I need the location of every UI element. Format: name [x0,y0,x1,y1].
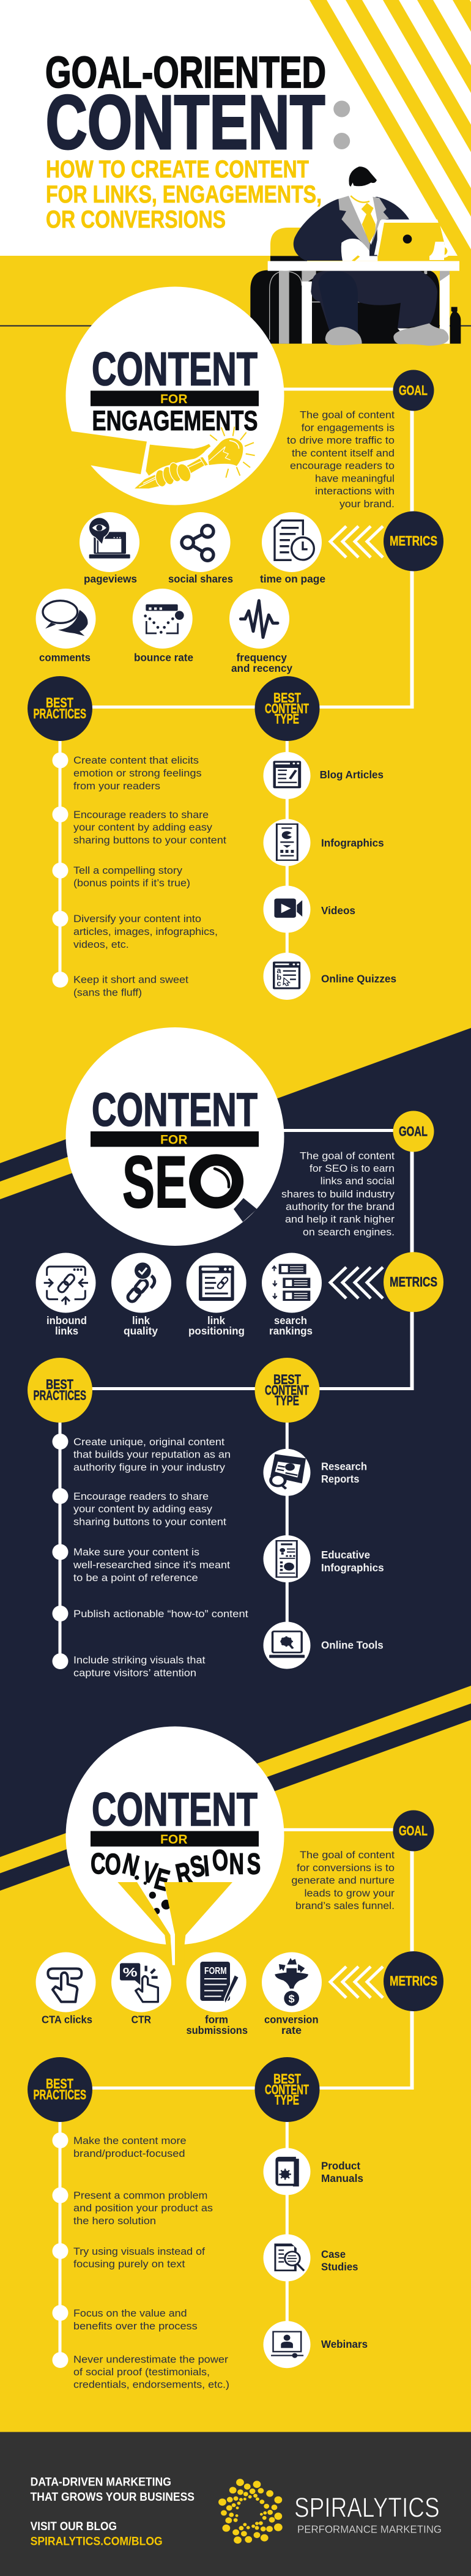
metric icon circles [35,1253,322,1313]
icon: link quality [126,1262,155,1303]
section 1 heading: CONTENT [92,343,258,395]
icon: case studies [274,2244,304,2271]
best practices list: Publish actionable “how-to” content [73,1608,248,1620]
icon: CTR [120,1963,158,2002]
goal description: the content itself and [292,447,395,459]
icon: webinars [271,2332,303,2358]
section 2 heading [91,1084,259,1223]
icon: social shares [182,526,213,560]
goal description: brand’s sales funnel. [295,1900,395,1912]
icon: pageviews [89,517,130,559]
section 3 connector lines [59,1828,414,2360]
section 1 heading: ENGAGEMENTS [92,405,258,436]
best practices badge: PRACTICES [33,706,86,721]
best practices list: Keep it short and sweet [73,974,188,986]
best content type badge: CONTENT [265,1383,309,1398]
icon: frequency [240,601,278,638]
best practices list: and position your product as [73,2202,213,2214]
content type labels: Online Quizzes [321,973,396,985]
content type labels [321,2159,368,2350]
content type labels [321,1461,384,1651]
navy section background [0,1028,471,1891]
goal badge: GOAL [399,1823,428,1838]
best practices badge: BEST [46,2076,73,2091]
metrics badge [384,1951,443,2011]
best practices list: the hero solution [73,2215,156,2227]
goal description: leads to grow your [305,1887,395,1899]
icon: educative infographics [276,1541,297,1577]
content type labels [320,769,396,985]
section 2: content for SEO [28,1027,443,1678]
arrow: metrics chevrons [330,1267,383,1298]
icon: CTR: % [123,1965,138,1980]
logo wordmark: PERFORMANCE MARKETING [297,2523,442,2536]
section 3 heading: S [247,1847,261,1880]
section 2 connector lines [59,1129,414,1661]
goal description: and help it rank higher [285,1213,395,1225]
illustration: arm holding bulb pencil [65,426,255,488]
best content type badge: BEST [273,1372,301,1387]
metric labels: conversion [264,2013,319,2025]
metric labels: links [55,1325,78,1337]
metric labels: CTA clicks [42,2013,92,2025]
footer tagline: VISIT OUR BLOG [31,2520,117,2533]
best practices list: sharing buttons to your content [73,835,226,846]
metric labels: CTR [132,2013,151,2025]
section 3 heading: E [151,1861,173,1897]
icon: research reports [270,1454,306,1489]
section 1: content for engagements [28,286,443,1000]
content type circles [263,752,311,1000]
icon: comments [43,601,87,636]
goal description: links and social [321,1175,395,1187]
icon: product manuals [275,2157,299,2186]
icon: search rankings [272,1264,310,1301]
metrics badge: METRICS [390,1973,437,1989]
metric labels: rankings [269,1325,313,1337]
icon: online quizzes [273,961,300,989]
best practices list: Tell a compelling story [73,865,183,876]
header stripes [310,0,471,256]
section 3 heading: N [229,1847,244,1880]
goal description: interactions with [315,485,395,497]
metric labels [46,1314,313,1337]
section 3 heading: O [105,1847,121,1880]
best practices badge [28,1358,92,1423]
footer background [0,2432,471,2576]
icon: form submissions [200,1962,239,2005]
footer tagline: DATA-DRIVEN MARKETING [31,2476,171,2489]
best practices list: brand/product-focused [73,2148,185,2159]
goal description: for engagements is [302,422,395,433]
metrics badge [384,512,443,571]
goal description: authority for the brand [286,1201,395,1213]
best practices list: of social proof (testimonials, [73,2366,210,2378]
metric labels: positioning [188,1325,245,1337]
arrow: metrics chevrons [330,526,383,557]
best content type badge [254,1358,319,1423]
best practices list: from your readers [73,780,160,792]
goal description: The goal of content [300,1150,395,1161]
title line: goal-oriented: GOAL-ORIENTED [45,48,326,97]
icon: inbound links [44,1267,88,1305]
logo wordmark [294,2492,442,2536]
goal badge: GOAL [399,1123,428,1139]
best practices badge: BEST [46,1377,73,1392]
best practices list: Create content that elicits [73,754,199,766]
best practices list: Encourage readers to share [73,1491,209,1502]
section 3 heading: N [119,1847,143,1882]
logo wordmark: SPIRALYTICS [294,2492,440,2523]
goal description: The goal of content [300,409,395,421]
best practices badge [28,2057,92,2122]
best practices list: to be a point of reference [73,1572,198,1584]
best practices bullets [53,2132,69,2368]
content type circles [263,1449,311,1669]
best content type badge [254,2057,319,2122]
section 2 heading: FOR [160,1133,187,1147]
best practices list: Diversify your content into [73,913,201,925]
icon: blog articles [273,761,301,788]
metric labels [39,573,325,674]
footer tagline: SPIRALYTICS.COM/BLOG [31,2535,163,2548]
best practices list: Try using visuals instead of [73,2246,205,2257]
icon: CTA clicks [48,1968,81,2002]
content type labels: Videos [321,904,355,917]
goal badge [393,1810,434,1852]
metric icon circles [35,1952,322,2012]
content type labels: Product [321,2159,360,2172]
metric labels: quality [124,1325,158,1337]
section 3 heading: C [91,1847,105,1880]
icon: online quizzes: c [276,978,281,988]
section 3 heading: FOR [160,1833,187,1847]
section 3 heading: V [139,1855,160,1890]
metric labels: form [205,2013,228,2025]
metric labels: frequency [236,652,287,664]
content type labels: Reports [321,1473,360,1485]
best content type badge [254,676,319,741]
best practices list: your content by adding easy [73,1503,213,1514]
icon: funnel [117,1875,232,1970]
best content type badge: TYPE [275,2093,299,2107]
content type labels: Educative [321,1549,370,1561]
section 3 heading: R [172,1855,195,1891]
content type labels: Manuals [321,2172,363,2184]
section 2 heading: SE [122,1141,187,1223]
best practices list: Create unique, original content [73,1436,224,1448]
best practices list: (bonus points if it’s true) [73,877,190,889]
goal description: encourage readers to [290,460,395,472]
metric labels: link [207,1314,225,1327]
section 3 heading: I [202,1848,210,1883]
icon: form submissions: FORM [204,1966,227,1976]
content type labels: Blog Articles [320,769,384,781]
content type labels: Studies [321,2261,358,2273]
goal description: your brand. [339,498,395,510]
best practices list: videos, etc. [73,939,129,950]
colon dots [333,100,350,149]
best content type badge: TYPE [275,711,299,727]
best practices list: sharing buttons to your content [73,1516,226,1527]
footer [31,2476,442,2548]
content type labels: Webinars [321,2338,368,2350]
best practices list: emotion or strong feelings [73,767,202,779]
content type labels: Case [321,2248,346,2260]
content type circles [263,2148,311,2368]
best practices list: Never underestimate the power [73,2353,228,2365]
metric labels: social shares [168,573,233,585]
goal description: for SEO is to earn [310,1163,395,1174]
section 3 title circle [66,1727,284,1945]
illustration: man at desk [250,166,461,346]
metric labels: pageviews [84,573,137,585]
metric labels: bounce rate [134,652,193,664]
best content type badge: TYPE [275,1393,299,1409]
section 3 heading: O [211,1842,229,1877]
metrics badge: METRICS [390,1274,437,1289]
subtitle: HOW TO CREATE CONTENT [46,156,309,183]
metrics badge [384,1252,443,1312]
best practices list: your content by adding easy [73,822,213,833]
best practices list [73,2135,229,2391]
content type labels: Research [321,1461,367,1473]
metric labels: link [132,1314,150,1327]
icon: infographics [276,824,297,860]
goal description [291,1849,395,1912]
section 1 connector lines [59,388,414,980]
best practices list: authority figure in your industry [73,1462,226,1473]
content type labels: Online Tools [321,1639,384,1651]
metric labels: submissions [186,2024,248,2036]
goal description: on search engines. [303,1226,395,1238]
goal description: generate and nurture [291,1875,395,1886]
best practices list: benefits over the process [73,2320,198,2332]
main title [45,48,350,165]
metric labels: and recency [231,662,292,674]
best content type badge: BEST [273,2071,301,2086]
icon: conversion rate [275,1958,308,2006]
section 2 title circle [66,1027,284,1246]
metric labels: search [274,1314,307,1327]
content type labels: Infographics [321,837,384,849]
metric labels [42,2013,319,2036]
icon: time on page [275,521,314,560]
best practices list: Make sure your content is [73,1546,199,1558]
icon: conversion rate: $ [289,1993,295,2005]
metric labels: inbound [46,1314,87,1327]
goal description: The goal of content [300,1849,395,1861]
subtitle [46,156,322,233]
goal description: have meaningful [315,472,395,484]
best content type badge: BEST [273,690,301,705]
content type labels: Infographics [321,1562,384,1574]
icon: videos [274,899,302,918]
best practices list: that builds your reputation as an [73,1449,231,1461]
goal badge [393,370,434,411]
best practices list: capture visitors’ attention [73,1667,196,1678]
section 3 heading: S [187,1848,207,1884]
best practices list: articles, images, infographics, [73,926,218,937]
best practices badge [28,676,92,741]
metrics badge: METRICS [390,534,437,548]
icon: online quizzes: a [276,966,281,975]
best practices list: credentials, endorsements, etc.) [73,2379,229,2391]
best practices badge: BEST [46,695,73,710]
icon: magnifier on SEO [195,1160,257,1222]
icon: bounce rate [144,605,184,634]
subtitle: FOR LINKS, ENGAGEMENTS, [46,181,322,208]
best practices badge: PRACTICES [33,2087,86,2102]
section 1 title circle [66,286,284,505]
icon: online tools [269,1631,305,1658]
section 3: content for conversions [28,1727,443,2391]
section 2 heading: O [191,1141,242,1222]
goal description [287,409,395,510]
best practices badge: PRACTICES [33,1388,86,1403]
goal description: to drive more traffic to [287,434,395,446]
best content type badge: CONTENT [265,2082,309,2098]
metric labels: rate [281,2024,302,2036]
goal description: for conversions is to [297,1862,395,1874]
footer tagline [31,2476,195,2548]
goal description: shares to build industry [281,1188,395,1200]
best practices list [73,1436,248,1678]
goal badge [393,1111,434,1152]
section 1 heading [91,343,259,436]
logo mark: dot spiral [218,2479,283,2544]
best practices list: Present a common problem [73,2189,207,2201]
section 1 heading: FOR [160,392,187,406]
metric icon circles [35,512,322,649]
best practices bullets [53,753,69,988]
best practices list: Include striking visuals that [73,1655,206,1666]
section 3 heading [91,1783,261,1897]
best practices list: well-researched since it’s meant [73,1559,230,1571]
footer tagline: THAT GROWS YOUR BUSINESS [31,2491,195,2504]
best practices list [73,754,226,998]
metric labels: comments [39,652,91,664]
best practices list: Make the content more [73,2135,186,2146]
best content type badge: CONTENT [265,701,309,716]
goal badge: GOAL [399,383,428,398]
metric labels: time on page [260,573,325,585]
subtitle: OR CONVERSIONS [46,206,226,233]
goal description [281,1150,395,1238]
title line: content: CONTENT [45,80,325,165]
arrow: metrics chevrons [330,1967,383,1998]
icon: online quizzes: b [276,973,281,982]
best practices list: Focus on the value and [73,2307,187,2319]
best practices list: Encourage readers to share [73,809,209,821]
best practices list: (sans the fluff) [73,986,142,998]
section 2 heading: CONTENT [92,1084,258,1136]
best practices bullets [53,1434,69,1669]
best practices list: focusing purely on text [73,2258,185,2270]
icon: link positioning [199,1265,234,1301]
section 3 heading: CONTENT [92,1783,258,1836]
